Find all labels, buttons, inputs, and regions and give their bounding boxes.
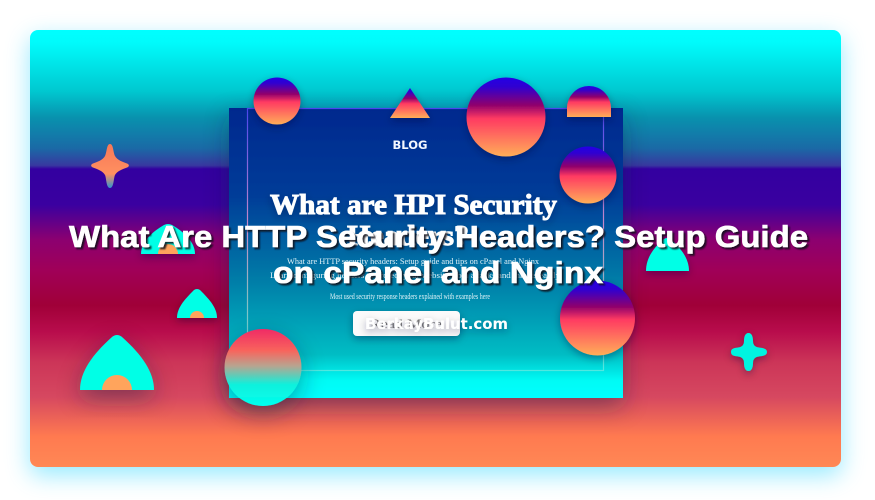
icon: large circle: [466, 78, 546, 156]
site name: BerkayBulut.com: [365, 315, 508, 333]
main title: [69, 220, 808, 290]
icon: half circle: [567, 86, 611, 117]
icon: dome right: [646, 238, 689, 271]
icon: plus sparkle: [731, 333, 767, 371]
panel body text: [270, 257, 560, 301]
panel heading: [270, 189, 557, 252]
panel heading: Headers?: [347, 220, 469, 252]
main title: What Are HTTP Security Headers? Setup Guide: [69, 220, 808, 254]
icon: four point star: [91, 144, 129, 188]
main title: on cPanel and Nginx: [273, 256, 603, 290]
icon: triangle: [390, 88, 430, 118]
panel label: BLOG: BLOG: [392, 138, 428, 152]
button: Read More: [370, 316, 442, 331]
icon: circle top left: [254, 78, 300, 124]
icon: circle lower left: [224, 329, 302, 406]
icon: dome left small: [177, 289, 217, 318]
panel body text: Learn configuring headers to protect your website from attacks and threats easily: [270, 271, 560, 280]
button: [353, 311, 460, 336]
panel heading: What are HPI Security: [270, 189, 557, 221]
icon: circle lower right: [560, 280, 635, 356]
icon: dome left large: [80, 335, 154, 390]
panel: blog card: [229, 108, 623, 398]
panel body text: What are HTTP security headers: Setup guide and tips on cPanel and Nginx: [287, 257, 539, 266]
icon: circle right: [560, 146, 616, 204]
icon: dome middle left: [141, 224, 195, 254]
panel body text: Most used security response headers explained with examples here: [330, 292, 490, 301]
